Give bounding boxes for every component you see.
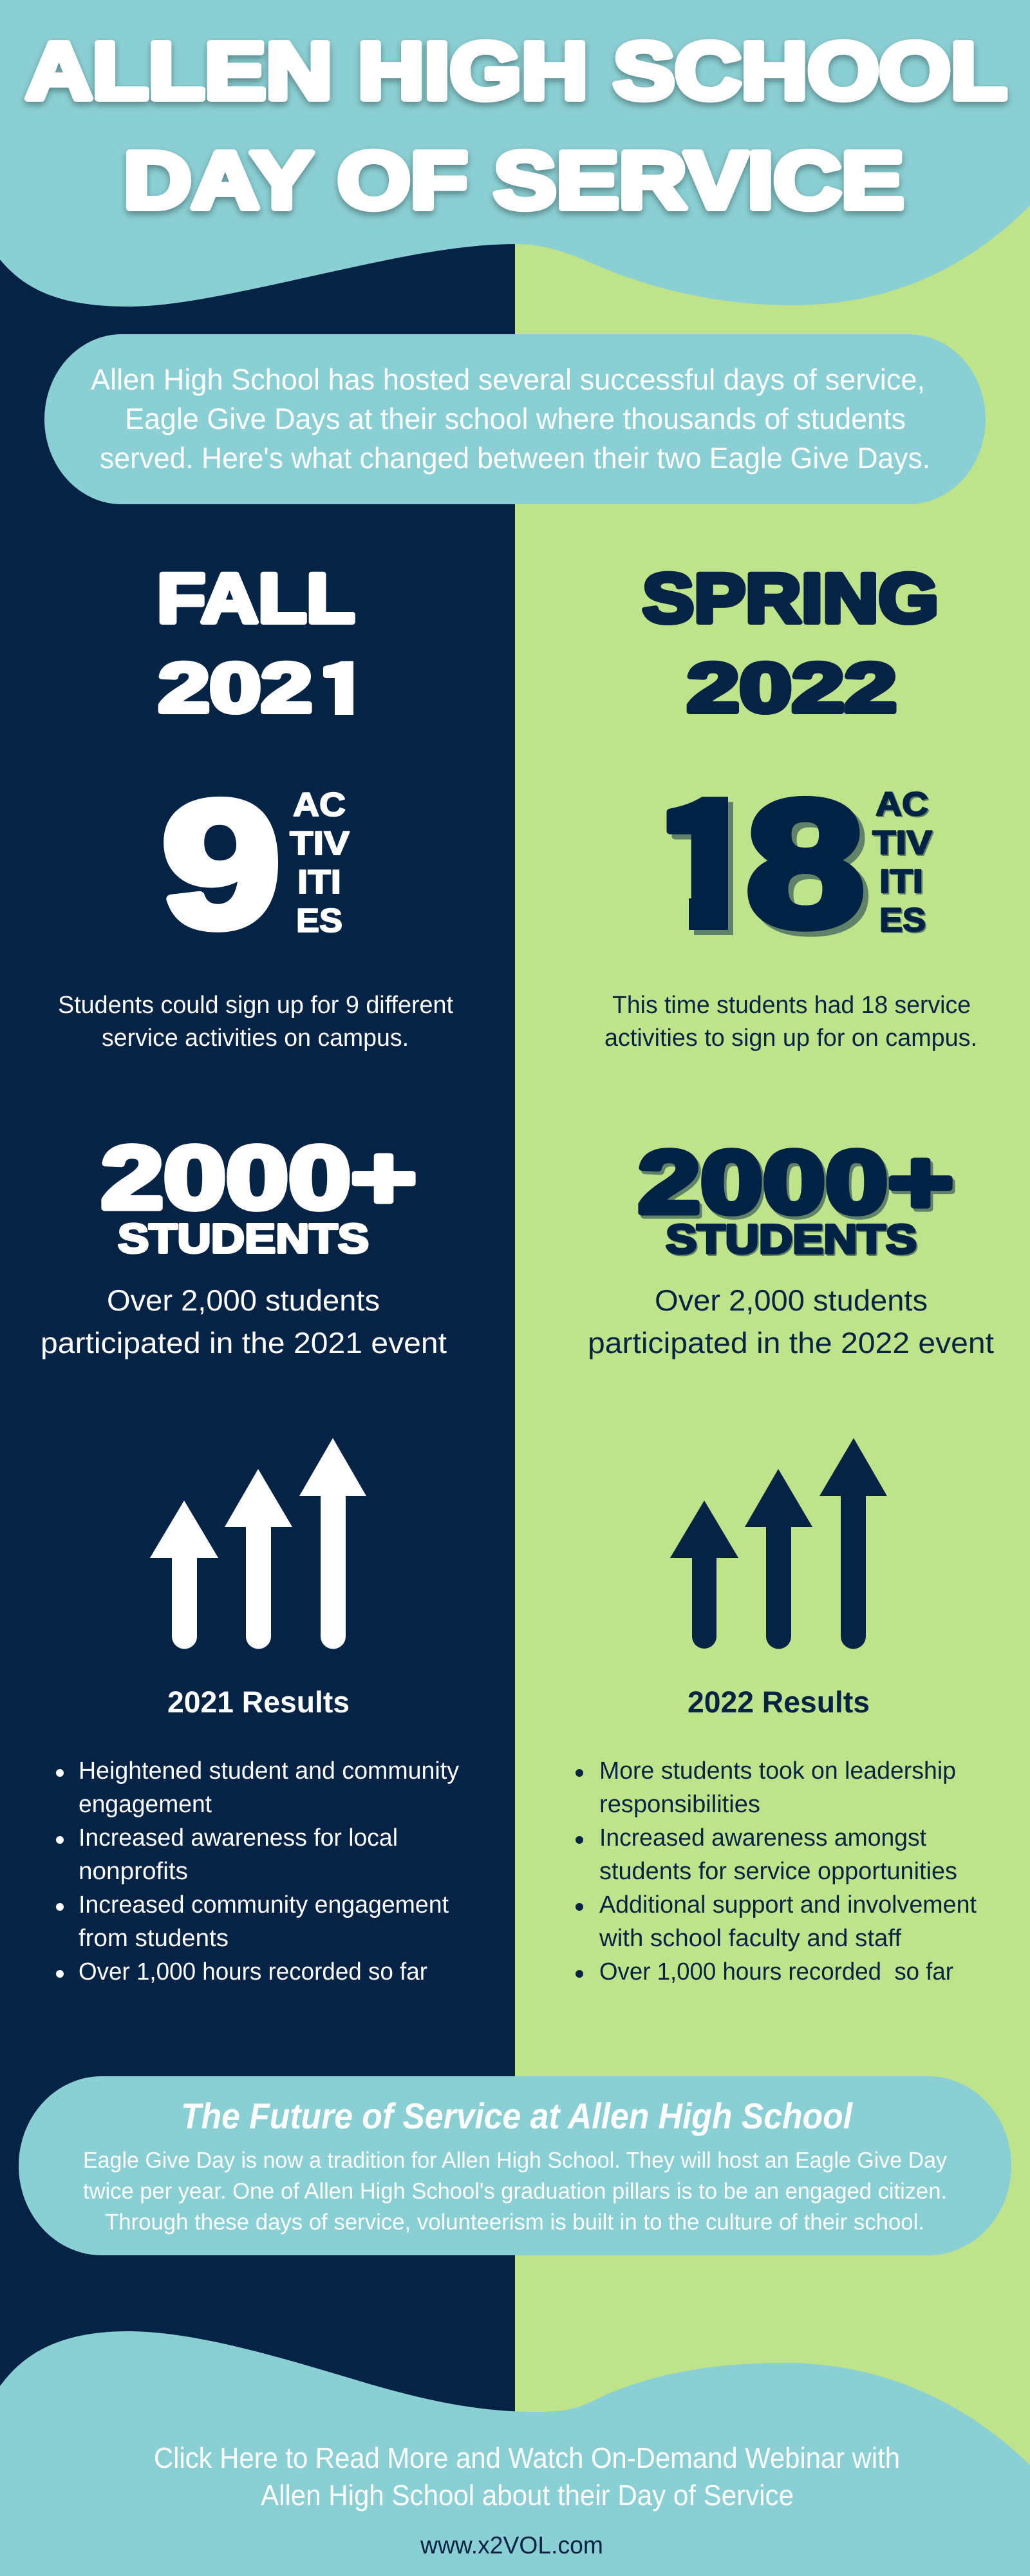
- stat: 18 activities: TIV: [872, 824, 932, 862]
- list: 2021 results: from students: [79, 1925, 229, 1952]
- intro callout: Eagle Give Days at their school where thousands of students: [125, 402, 906, 435]
- callout body text: Eagle Give Day is now a tradition for Allen High School. They will host an Eagle Give Day: [83, 2148, 947, 2173]
- panel: green right background: [515, 0, 1030, 2576]
- heading: 2021 results: 2021 Results: [167, 1685, 350, 1719]
- text: students description: Over 2,000 students: [655, 1283, 928, 1317]
- list: 2022 results: with school faculty and staff: [599, 1925, 901, 1952]
- stat: 18 activities: [667, 791, 934, 937]
- website url: www.x2VOL.com: [420, 2532, 603, 2559]
- callout: the future of service: [19, 2076, 1011, 2255]
- list: 2022 results: Over 1,000 hours recorded so far: [599, 1958, 953, 1985]
- text: activities description: activities to sign up for on campus.: [604, 1025, 977, 1052]
- text: students description: participated in the 2022 event: [588, 1326, 994, 1359]
- text: activities description: Students could sign up for 9 different: [58, 992, 453, 1019]
- panel: Fall 2021 column: [41, 559, 459, 1985]
- text: students description: [41, 1283, 447, 1359]
- intro callout: Allen High School has hosted several successful days of service,: [91, 363, 925, 396]
- heading: Fall 2021: 202: [158, 649, 312, 726]
- heading: Spring 2022: SPRING: [642, 559, 939, 637]
- callout heading: The Future of Service at Allen High School: [181, 2096, 853, 2136]
- list: 2022 results: Increased awareness amongst: [599, 1824, 926, 1852]
- stat: 2000+ students: STUDENTS: [118, 1215, 369, 1262]
- call to action text: Allen High School about their Day of Service: [261, 2479, 794, 2512]
- heading: Fall 2021: [158, 572, 355, 715]
- panel: Spring 2022 column: [576, 559, 994, 1985]
- stat: 9 activities: 9: [162, 764, 281, 964]
- stat: 9 activities: AC: [293, 786, 346, 824]
- stat: 18 activities: 8: [746, 763, 865, 963]
- top teal wave header: [0, 0, 1030, 307]
- callout body text: twice per year. One of Allen High School's graduation pillars is to be an engaged citizen.: [83, 2179, 947, 2204]
- heading: 2022 results: 2022 Results: [688, 1685, 870, 1719]
- list: 2022 results: responsibilities: [599, 1791, 760, 1818]
- intro callout: served. Here's what changed between their two Eagle Give Days.: [100, 441, 930, 475]
- stat: 2000+ students: 2000+: [101, 1128, 417, 1227]
- text: students description: [588, 1283, 994, 1359]
- panel: navy left background: [0, 0, 515, 2576]
- stat: 2000+ students: [638, 1133, 953, 1262]
- stat: 18 activities: ITI: [879, 863, 923, 900]
- stat: 9 activities: TIV: [290, 825, 350, 862]
- heading: Fall 2021: FALL: [157, 559, 355, 637]
- heading: Fall 2021: 1: [318, 634, 370, 732]
- heading: Spring 2022: [642, 559, 939, 726]
- list: 2021 results: Increased awareness for local: [79, 1824, 398, 1852]
- text: activities description: service activities on campus.: [102, 1025, 409, 1052]
- list: 2022 results: More students took on leadership: [599, 1757, 956, 1785]
- list: 2022 results: students for service opportunities: [599, 1858, 957, 1885]
- title: DAY OF SERVICE: [124, 136, 904, 225]
- text: activities description: [58, 992, 453, 1052]
- list: 2021 results: Heightened student and community: [79, 1757, 459, 1785]
- callout body text: [83, 2148, 947, 2235]
- heading: Spring 2022: 2022: [687, 649, 897, 726]
- list: 2021 results: engagement: [79, 1791, 212, 1818]
- call to action text: Click Here to Read More and Watch On-Demand Webinar with: [154, 2441, 900, 2474]
- stat: 18 activities: 1: [652, 725, 762, 978]
- intro callout: [44, 334, 986, 504]
- bottom teal wave footer: [0, 2331, 1030, 2576]
- stat: 2000+ students: 2000+: [638, 1133, 953, 1232]
- icon: three rising arrows: [670, 1438, 887, 1649]
- list: 2021 results: [56, 1757, 459, 1985]
- text: activities description: [604, 992, 977, 1052]
- stat: 2000+ students: STUDENTS: [666, 1216, 917, 1262]
- call to action text: [154, 2441, 900, 2512]
- title: [26, 26, 1007, 225]
- list: 2022 results: [576, 1757, 977, 1985]
- text: activities description: This time students had 18 service: [612, 992, 971, 1019]
- list: 2022 results: Additional support and involvement: [599, 1891, 977, 1918]
- text: students description: Over 2,000 students: [107, 1283, 380, 1317]
- title: ALLEN HIGH SCHOOL: [26, 26, 1007, 116]
- list: 2021 results: nonprofits: [79, 1858, 188, 1885]
- stat: 2000+ students: [101, 1128, 417, 1262]
- stat: 18 activities: AC: [876, 786, 928, 823]
- stat: 9 activities: ITI: [297, 864, 341, 901]
- text: students description: participated in the 2021 event: [41, 1326, 447, 1359]
- list: 2021 results: Over 1,000 hours recorded so far: [79, 1958, 427, 1985]
- stat: 18 activities: ES: [879, 902, 926, 939]
- icon: three rising arrows: [150, 1438, 366, 1649]
- list: 2021 results: Increased community engagement: [79, 1891, 449, 1918]
- callout body text: Through these days of service, volunteerism is built in to the culture of their school.: [105, 2210, 924, 2235]
- stat: 9 activities: ES: [296, 902, 342, 940]
- stat: 9 activities: [162, 764, 350, 964]
